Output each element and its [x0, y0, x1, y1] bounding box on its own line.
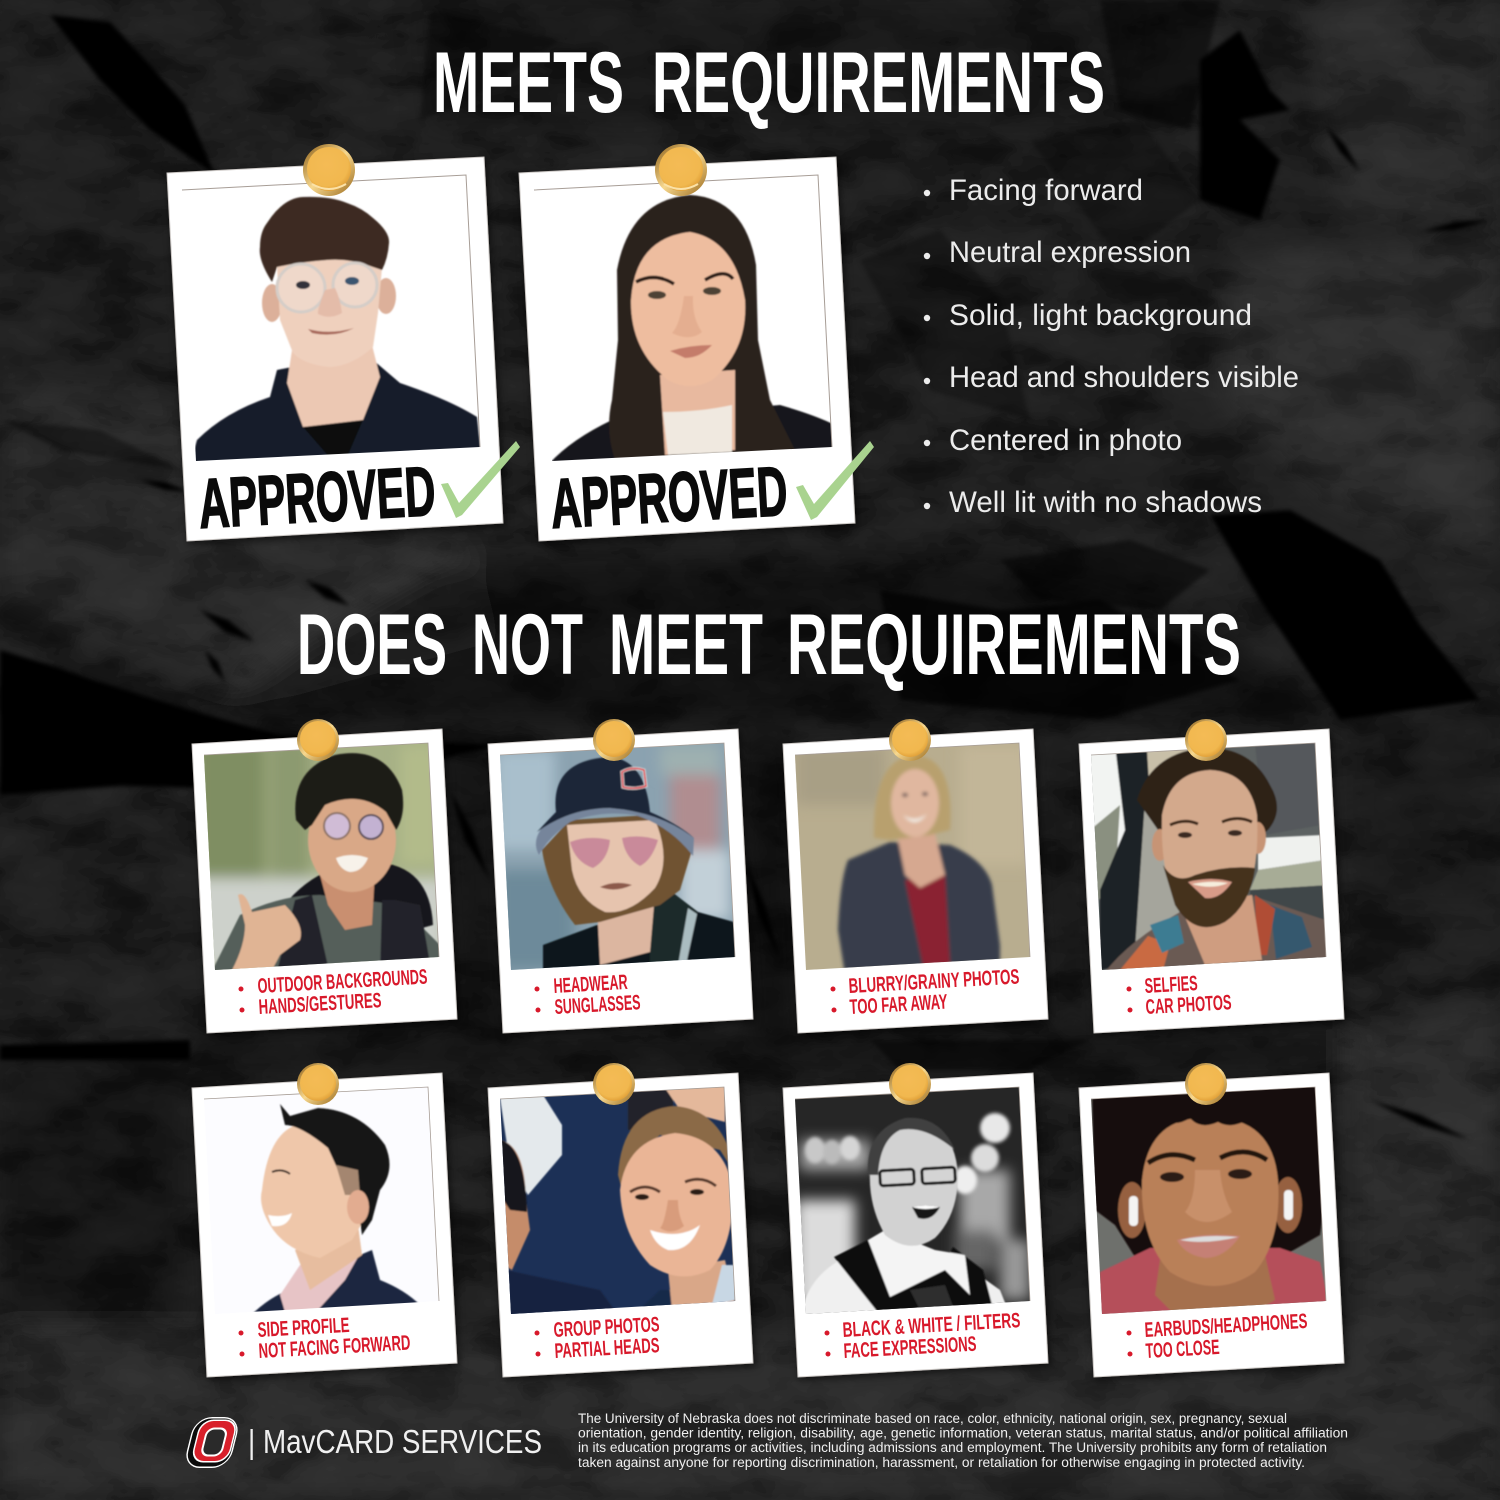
- checklist: photo requirements: Centered in photo: [949, 424, 1182, 457]
- caption: group photos, partial heads: PARTIAL HEADS: [554, 1334, 660, 1363]
- legal: non-discrimination statement: orientation, gender identity, religion, disability, age, genetic information, veteran status, marital status, and/or political affiliation: [578, 1426, 1348, 1440]
- photo: bucket hat and sunglasses: [490, 740, 740, 975]
- caption: black and white / filters, face expressions: FACE EXPRESSIONS: [843, 1333, 977, 1363]
- label: approved: APPROVED: [196, 452, 437, 543]
- photo: blurry woman in blazer: [785, 740, 1035, 975]
- photo: man in side profile: [252, 1104, 418, 1312]
- title: does not meet requirements: DOES: [297, 597, 447, 693]
- caption: outdoor backgrounds, hands/gestures: [238, 966, 428, 1019]
- icon: gold pin: [1185, 719, 1227, 761]
- portrait: approved young person with glasses: [195, 196, 480, 461]
- panel: black and white example: [783, 1063, 1048, 1377]
- icon: gold pin: [593, 1063, 635, 1105]
- caption: headwear, sunglasses: [534, 971, 641, 1019]
- panel: earbuds example: [1079, 1063, 1344, 1377]
- icon: gold pin: [297, 1063, 339, 1105]
- caption: earbuds/headphones, too close: [1126, 1310, 1308, 1363]
- photo: car selfie of bearded man: [1085, 740, 1335, 975]
- icon: gold pin: [889, 719, 931, 761]
- title: does not meet requirements: NOT: [472, 597, 583, 693]
- legal: non-discrimination statement: [578, 1411, 1348, 1470]
- panel: approved photo 2: [519, 144, 874, 543]
- caption: headwear, sunglasses: HEADWEAR: [553, 971, 628, 998]
- title: meets requirements: MEETS: [433, 35, 624, 131]
- caption: headwear, sunglasses: SUNGLASSES: [554, 991, 641, 1019]
- icon: gold pin: [297, 719, 339, 761]
- panel: approved photo 1: [167, 144, 520, 543]
- caption: blurry/grainy photos, too far away: BLURRY/GRAINY PHOTOS: [848, 965, 1020, 998]
- icon: gold pin: [593, 719, 635, 761]
- checklist: photo requirements: Well lit with no shadows: [949, 486, 1262, 519]
- title: does not meet requirements: REQUIREMENTS: [787, 597, 1241, 693]
- label: approved: APPROVED: [548, 452, 789, 543]
- caption: selfies, car photos: SELFIES: [1144, 972, 1198, 998]
- panel: group photo example: [488, 1063, 753, 1377]
- photo: outdoor smiling man: [195, 740, 445, 975]
- panel: selfie example: [1079, 719, 1344, 1033]
- photo: black and white laughing man: [785, 1085, 1035, 1320]
- panel: blurry photo example: [783, 719, 1048, 1033]
- photo: group with partial heads: [490, 1085, 740, 1320]
- icon: gold pin: [889, 1063, 931, 1105]
- icon: gold pin: [303, 144, 355, 196]
- icon: green check: [796, 441, 874, 520]
- checklist: photo requirements: [924, 174, 1299, 519]
- caption: black and white / filters, face expressions: [824, 1309, 1021, 1363]
- legal: non-discrimination statement: taken against anyone for reporting discrimination, harassment, or retaliation for otherwise engaging in protected activity.: [578, 1455, 1305, 1470]
- panel: side profile example: [192, 1063, 457, 1377]
- title: does not meet requirements: MEET: [609, 597, 763, 693]
- icon: gold pin: [655, 144, 707, 196]
- caption: side profile, not facing forward: NOT FACING FORWARD: [258, 1332, 411, 1363]
- caption: group photos, partial heads: [534, 1313, 660, 1363]
- icon: gold pin: [1185, 1063, 1227, 1105]
- caption: outdoor backgrounds, hands/gestures: OUTDOOR BACKGROUNDS: [257, 966, 428, 998]
- brand: MavCARD Services: | MavCARD SERVICES: [248, 1423, 542, 1460]
- portrait: approved woman with long hair: [552, 194, 832, 461]
- checklist: photo requirements: Solid, light background: [949, 299, 1252, 332]
- panel: outdoor backgrounds example: [192, 719, 457, 1033]
- checklist: photo requirements: Neutral expression: [949, 236, 1191, 269]
- caption: group photos, partial heads: GROUP PHOTOS: [553, 1313, 660, 1342]
- caption: blurry/grainy photos, too far away: TOO FAR AWAY: [849, 991, 948, 1019]
- legal: non-discrimination statement: in its education programs or activities, including admissions and employment. The University prohibits any form of retaliation: [578, 1440, 1327, 1455]
- caption: blurry/grainy photos, too far away: [830, 965, 1020, 1019]
- caption: side profile, not facing forward: [238, 1314, 411, 1363]
- logo: UNO O mark: [183, 1417, 241, 1468]
- title: meets requirements: REQUIREMENTS: [652, 35, 1105, 131]
- caption: outdoor backgrounds, hands/gestures: HANDS/GESTURES: [258, 989, 382, 1019]
- caption: selfies, car photos: [1126, 972, 1232, 1019]
- panel: headwear example: [488, 719, 753, 1033]
- checklist: photo requirements: Facing forward: [949, 174, 1143, 207]
- title: meets requirements: [433, 35, 1105, 131]
- checklist: photo requirements: Head and shoulders visible: [949, 361, 1299, 394]
- photo: close-up with earbuds: [1091, 1088, 1326, 1314]
- caption: black and white / filters, face expressions: BLACK & WHITE / FILTERS: [842, 1309, 1021, 1342]
- caption: earbuds/headphones, too close: EARBUDS/HEADPHONES: [1144, 1310, 1308, 1342]
- icon: green check: [441, 441, 520, 518]
- title: does not meet requirements: [297, 597, 1241, 693]
- caption: side profile, not facing forward: SIDE PROFILE: [257, 1314, 350, 1342]
- legal: non-discrimination statement: The University of Nebraska does not discriminate based on race, color, ethnicity, national origin, sex, pregnancy, sexual: [578, 1411, 1287, 1426]
- caption: earbuds/headphones, too close: TOO CLOSE: [1145, 1336, 1220, 1363]
- caption: selfies, car photos: CAR PHOTOS: [1145, 991, 1232, 1019]
